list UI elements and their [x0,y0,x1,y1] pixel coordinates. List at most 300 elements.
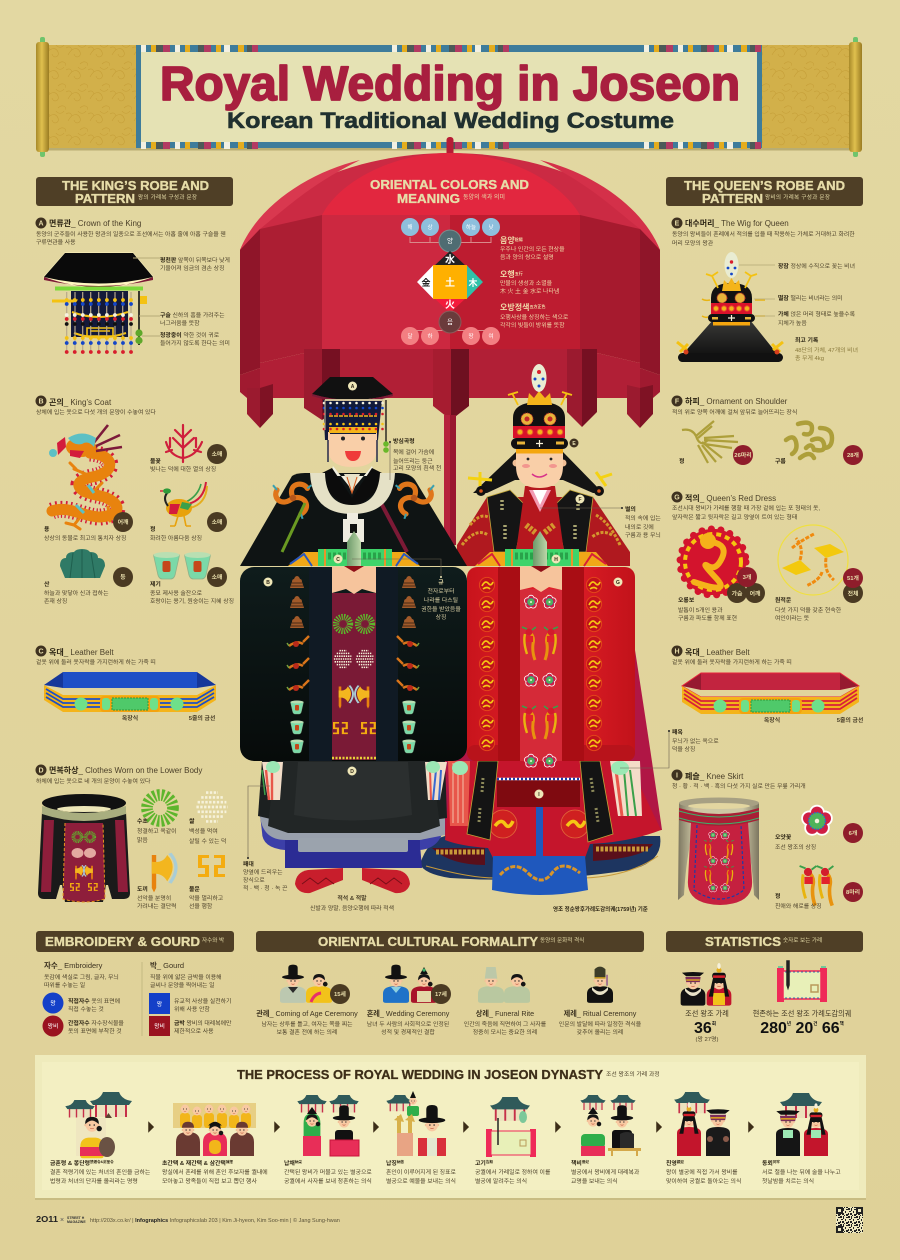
illustration: knee skirt [678,798,759,905]
captions G [678,596,842,622]
embroidery notes: 간접자수 자수장식물을 [68,1019,124,1027]
gourd text: 박_ Gourd [150,960,184,970]
callout lines [248,443,669,858]
heading: oriental colors: ORIENTAL COLORS AND [370,177,529,192]
embroidery notes [68,997,124,1035]
parasol hanging strips [247,349,653,428]
footer credits: × [60,1217,64,1224]
captions B: 제기 [150,580,161,588]
callout text A: 들어가지 않도록 한다는 의미 [160,339,230,347]
element diamond: 火 [445,299,455,311]
illustration: red belt [682,673,859,714]
element diamond: 水 [445,253,455,266]
callout text A: 기울어져 임금의 겸손 상징 [160,264,225,272]
heading bar formality: ORIENTAL CULTURAL FORMALITY [318,934,538,949]
icon: flame coral [166,425,202,462]
heading: oriental colors: MEANING [397,191,460,206]
badge labels F: 꿩 [679,457,684,465]
panel: G red dress [672,492,863,622]
callout: 패대: 장식으로 [243,876,265,884]
panel: queen's robe header: THE QUEEN’S ROBE AND [684,179,845,193]
king collar [310,468,395,542]
footer credits: STREET H [67,1216,85,1220]
stat: wedding count: 36 [694,1020,712,1037]
badge labels G: 3개 [743,573,751,581]
queen coat center motifs [522,595,558,767]
section title H: H [674,648,680,656]
stat: document count: 20 [791,1020,813,1037]
king face [323,400,382,490]
king jade tablet [347,531,361,566]
caption step 8 [762,1159,841,1185]
badge labels G: 어깨 [750,590,761,598]
callout text A: 평천판 앞쪽이 뒤쪽보다 낮게 [160,256,230,264]
icon: axe [152,853,178,892]
captions I: 친애와 해로를 상징 [775,902,822,910]
callout text E: 가체 얹은 머리 형태로 높을수록 [778,310,856,318]
caption step 2 [162,1159,268,1185]
five elements diagram [401,218,500,345]
caption step 5: 고기 [475,1161,486,1167]
caption coming of age [256,1009,358,1036]
heading bar embroidery: EMBROIDERY & GOURD [45,934,200,949]
callout: 방심곡령: 고리 모양의 흰색 천 [393,464,441,472]
caption step 7: 친영 [666,1161,677,1167]
badges I [843,823,863,902]
panel: I knee skirt [672,770,863,910]
gold brocade panels [49,45,849,150]
arrow 2 [275,1123,279,1131]
icon: ritual officiant [587,967,613,1003]
process heading: 조선 왕조의 가례 과정 [606,1070,660,1078]
callout lines E [739,265,775,316]
yang circles: 낮 [489,223,494,231]
callout: 규: 나라를 다스릴 [424,596,458,604]
caption step 6: 冊妃 [582,1159,589,1164]
captions B: 산 [44,580,50,588]
caption step 8: 첫날밤을 치르는 의식 [762,1177,814,1185]
step 4 [386,1091,457,1185]
callout text E: 떨잠 떨리는 비녀라는 의미 [778,294,843,302]
heading bar embroidery: 자수와 박 [202,936,224,944]
badge 15세: 15세 [334,990,346,998]
embroidery notes: 옷의 표면에 부착한 것 [68,1027,122,1035]
gourd notes: 금박 왕비의 대례복에만 [174,1019,232,1027]
belt labels H: 5줄의 금선 [837,716,863,724]
icon: ritual cups [154,552,210,579]
section title G [672,492,820,521]
callout text A: 구슬 신하의 흠을 가려주는 [160,311,225,319]
figure tags: E [572,441,576,447]
gourd notes [174,997,232,1035]
illustration: skirt [38,794,130,902]
illustration step 8 [776,1093,828,1156]
caption step 6: 책비 [571,1161,582,1167]
queen skirt hem [420,836,660,880]
colors explanation text: 만물의 생성과 소멸을 [500,279,553,287]
stat: document count [753,1009,851,1037]
figure tags: I [538,792,540,798]
callout lines A [133,258,160,336]
heading: oriental colors: 동양의 색과 의미 [463,193,505,201]
caption step 7 [666,1159,741,1185]
section title C: 겉옷 위에 둘러 옷자락을 가지런하게 하는 가죽 띠 [36,658,156,666]
panel: embroidery and gourd [36,931,234,1036]
ceremony: funeral [464,967,547,1036]
colors explanation text [500,235,569,329]
heading bar formality [256,931,644,952]
callout: 규: 규 [438,579,444,586]
colors explanation text: 陰陽 [515,236,523,242]
queen trailing robe [444,600,662,840]
caption step 2: 揀擇 [226,1159,233,1164]
yang circles: 하늘 [466,223,476,231]
stat: document count: 건 [813,1020,817,1026]
section title E: 동양의 왕비들이 혼례에서 적의를 입을 때 착용하는 가체로 거대하고 화려한 [672,230,855,238]
illustration step 4 [386,1091,446,1156]
queen crown head [468,364,612,486]
illustration step 6 [580,1095,641,1156]
yin circles: 음 [447,318,453,326]
blue frame with stripes [136,45,762,149]
colors explanation text: 음과 양의 쌍으로 설명 [500,253,554,261]
figure tags: B [266,580,270,586]
section title B: 곤의_ King’s Coat [49,397,112,407]
yin circles: 달 [408,332,413,340]
captions D: 불문 [189,885,200,893]
section title E: 머리 모양의 왕관 [672,239,714,247]
illustration step 1 [65,1092,132,1158]
callout: 규: 권한을 받았음을 [421,605,461,613]
belt labels: 5줄의 금선 [189,714,215,722]
section title D [36,764,202,785]
section title F: 적의 위로 양쪽 어깨에 걸쳐 앞뒤로 늘어뜨리는 장식 [672,408,797,416]
icon: dragon medallion [680,529,746,595]
embroidery text: 자수_ Embroidery [44,961,103,970]
callout: 규 [421,576,461,621]
belt labels: 옥장식 [122,714,138,722]
yin circles [401,311,500,345]
panel: queen's robe header: PATTERN [702,192,763,206]
badge labels B: 소매 [212,573,222,581]
king black coat [240,566,467,761]
caption step 7: 親迎 [677,1159,684,1164]
caption step 6: 별궁에서 왕비에게 대례복과 [571,1168,640,1176]
illustration step 2 [173,1103,256,1156]
heading bar statistics: 숫자로 보는 가례 [783,936,822,944]
icon: olive phoenix [682,421,738,463]
illustration step 5 [486,1097,536,1157]
king crown [312,377,393,453]
caption funeral: 정중히 모시는 중요한 의례 [473,1028,537,1036]
captions D: 쌀 [189,817,195,825]
process heading: THE PROCESS OF ROYAL WEDDING IN JOSEON DYNASTY [237,1067,603,1082]
callout: 패대: 패대 [243,860,254,868]
queen skirt [445,761,661,858]
callout: 별의: 구름과 용 무늬 [625,531,661,539]
panel: oriental cultural formality [256,931,644,1036]
caption step 8: 同牢 [773,1159,780,1164]
king shoulder dragons [273,484,434,519]
scroll roller right [849,37,862,157]
arrow 6 [657,1123,661,1131]
description A: 동양의 군주들이 사용한 왕관의 일종으로 조선에서는 아홉 줄에 아홉 구슬을 꿴 [36,230,226,238]
section title A: 면류관_ Crown of the King [49,218,141,228]
panel: queen's robe header: 왕비의 가례복 구성과 문장 [765,193,830,201]
king blue layer [260,810,445,868]
footer credits: MAGAZINE [67,1220,86,1224]
callout: 패옥: 패옥 [672,728,683,736]
icon: water weed [147,795,173,821]
panel: process of royal wedding [35,1055,866,1200]
captions G: 오룡보 [678,597,695,604]
footer credits [36,1215,340,1224]
figure tags: A [351,384,355,390]
caption step 8: 동뢰 [762,1161,773,1167]
embroidery queen marker: 왕비 [48,1022,58,1030]
callout text E: 총 무게 4kg [795,354,824,362]
section title F: 하피_ Ornament on Shoulder [685,396,788,406]
callout text A: 청광충이 약한 것이 귀로 [160,331,220,339]
ceremony: coming of age [256,965,358,1036]
stat: document count: 280 [760,1020,787,1037]
caption wedding [367,1009,450,1036]
belt labels H [764,716,863,724]
captions I: 꿩 [775,892,780,900]
heading bar formality: 동양의 문화적 격식 [540,936,584,944]
queen upper robe [457,486,630,566]
yang circles: 양 [447,237,453,245]
caption step 5: 궁궐에서 가례일로 정하여 이를 [475,1168,551,1176]
panel: C leather belt [36,646,216,722]
caption step 1: 결혼 적령기에 있는 처녀의 혼인을 금하는 [50,1168,151,1176]
step 2 [162,1103,268,1185]
caption step 1: 禁婚令&封單令 [90,1159,114,1164]
figure tags: F [578,497,582,503]
badge labels B: 등 [120,574,126,581]
icon: fu symbol [198,855,225,877]
belt labels [122,714,215,722]
yin circles: 여 [489,332,494,340]
panel: king's robe header: THE KING’S ROBE AND [62,179,209,193]
caption step 7: 왕이 별궁에 직접 가서 왕비를 [666,1168,738,1176]
queen blue front panel [492,779,588,895]
caption step 5: 별궁에 알려주는 의식 [475,1177,527,1185]
callout: 패옥: 덕을 상징 [672,745,695,753]
caption step 2: 왕실에서 혼례를 위해 혼인 후보자를 궐내에 [162,1168,268,1176]
callout: 규: 천자로부터 [427,587,455,595]
badge 17세: 17세 [435,990,447,998]
caption step 4: 납징 [386,1161,397,1167]
captions B: 화려한 아름다움 상징 [150,534,202,542]
icon: mountain [60,549,105,578]
panel: D lower clothes [36,764,228,910]
caption step 5: 告期 [486,1159,493,1164]
section title E: E [675,220,680,228]
colors explanation text: 각각의 빛들이 방위를 뜻함 [500,321,565,329]
caption step 2: 초간택 & 재간택 & 삼간택 [162,1161,226,1167]
badges B [113,444,227,587]
captions D: 가려내는 결단력 [137,902,177,910]
caption step 5 [475,1159,551,1185]
process background [35,1055,866,1200]
section title C: C [38,648,44,656]
caption step 4: 혼인이 이루어지게 된 징표로 [386,1168,457,1176]
caption step 6: 교명을 보내는 의식 [571,1177,618,1185]
captions D: 악을 멀리하고 [189,894,224,902]
figure tags: C [336,557,340,563]
icon: royal couple [681,963,731,1006]
section title I: 폐슬_ Knee Skirt [685,771,744,781]
section title F [672,396,797,416]
step 3 [284,1095,372,1185]
yang circles: 해 [408,223,413,231]
embroidery king marker: 왕 [50,999,56,1007]
stat: document count: 년 [787,1020,791,1026]
callout: 방심곡령: 방심곡령 [393,437,415,445]
caption step 3: 納采 [295,1159,302,1164]
stat: wedding count: 조선 왕조 가례 [685,1009,729,1018]
captions D: 맑음 [137,836,148,844]
step 1 [50,1092,151,1185]
scroll roller left [36,37,49,157]
illustration: wig [677,252,783,362]
section title G: 적의_ Queen’s Red Dress [685,493,776,503]
colors explanation text: 五方正色 [529,303,545,309]
heading bar statistics [666,931,863,952]
king black skirt [258,761,447,833]
badge labels B [118,450,222,581]
figure: king [240,377,467,893]
gourd queen marker [149,1016,170,1036]
caption step 4: 별궁으로 예물을 보내는 의식 [386,1177,456,1185]
caption ritual: 인문의 발달에 따라 일정한 격식을 [559,1020,642,1028]
captions B: 존재 상징 [44,597,67,605]
badges G [727,567,863,603]
colors explanation text: 오방정색 [500,303,529,312]
gourd text: 글씨나 문양을 찍어내는 일 [150,981,215,989]
section title D: D [38,768,44,774]
section title I [672,770,806,790]
arrow 1 [149,1123,153,1131]
callout: 적석 적말: 적석 & 적말 [337,894,367,902]
icon: coming of age couple [280,965,332,1003]
section title G: 조선시대 왕비가 가례를 행할 때 가장 겉에 입는 포 형태의 옷, [672,504,820,512]
caption funeral [464,1009,547,1036]
captions B: 빛나는 덕에 대한 열의 상징 [150,465,216,473]
captions I [775,829,860,910]
panel: king's robe header: PATTERN [75,192,135,206]
caption step 7: 맞이하여 궁궐로 돌아오는 의식 [666,1177,741,1185]
badge labels B: 어깨 [118,518,129,526]
colors explanation text: 五行 [515,270,523,276]
badge labels G: 51개 [847,574,859,582]
source note: 영조 정순왕후가례도감의궤(1759년) 기준 [553,905,648,913]
yang circles: 상 [428,223,433,231]
panel: E wig [672,218,858,362]
callout: 패옥: 무늬가 없는 옥으로 [672,737,719,745]
main title: Royal Wedding in Joseon [160,58,740,111]
section title I: I [676,772,678,780]
icon: wedding couple [383,965,437,1003]
panel: H leather belt [672,646,863,724]
captions B: 종묘 제사용 술잔으로 [150,589,203,597]
QR code [836,1207,863,1233]
callout text A: 너그러움을 뜻함 [160,319,200,327]
caption step 4 [386,1159,457,1185]
captions I: 6개 [849,829,857,837]
section title B: B [38,398,44,406]
gourd notes: 유교적 사상을 실천하기 [174,997,231,1005]
queen jade tablet [533,531,547,566]
callout text E: 지체가 높음 [778,319,807,327]
step 7 [666,1092,741,1185]
colors explanation text: 음양 [500,236,515,245]
element diamond: 木 [468,277,478,288]
king tassels [262,761,447,800]
section title D: 하체에 입는 옷으로 네 개의 문양이 수놓여 있다 [36,777,151,785]
step 5 [475,1097,551,1185]
parasol pole [444,415,456,545]
heading bar embroidery [36,931,234,952]
section title B: 상체에 입는 옷으로 다섯 개의 문양이 수놓여 있다 [36,408,156,416]
gourd notes: 제한적으로 사용 [174,1027,214,1035]
callout text A [160,256,230,347]
panel: A crown of the king [36,218,230,352]
stat: wedding count: 회 [712,1020,716,1027]
callout: 적석 적말 [310,894,394,912]
callout text E: 장잠 정상에 수직으로 꽂는 비녀 [778,262,855,270]
colors explanation text: 木 火 土 金 水로 나타냄 [500,287,559,295]
caption step 1: 법령과 처녀의 단자를 올리라는 명령 [50,1177,138,1185]
embroidery text: 따위를 수놓는 일 [44,981,85,989]
callout: 규: 상징 [436,613,446,621]
callout: 별의 [621,505,661,539]
yang circles [401,218,500,252]
parasol knob [446,137,454,157]
panel: statistics [666,931,863,1043]
badges F [733,445,863,465]
section title A: A [38,220,44,228]
callout: 패대: 적 · 백 · 청 · 녹 끈 [243,884,288,892]
captions G: 발톱이 5개인 용과 [678,606,723,614]
callout text E [778,262,858,362]
heading bar statistics: STATISTICS [705,934,781,949]
captions D: 살릴 수 있는 덕 [189,837,226,845]
colors explanation text: 오행 [500,270,515,279]
embroidery text [44,961,119,989]
element diamond: 土 [445,276,455,289]
element diamond: 金 [421,277,431,288]
icon: dragon [49,425,122,529]
panel: king's robe header [36,177,233,206]
callout: 방심곡령 [389,437,441,472]
caption step 3: 납채 [284,1161,295,1167]
callout: 적석 적말: 신발과 양말, 음양오행에 따라 적색 [310,904,394,912]
callouts on figures [243,437,719,913]
icon: royal document [777,961,827,1002]
captions D: 청결하고 옥같이 [137,827,177,835]
captions B: 하늘과 맞닿아 신과 접하는 [44,589,109,597]
caption step 3 [284,1159,372,1185]
embroidery notes: 직접 수놓는 것 [68,1005,104,1013]
queen hair wig [473,452,604,496]
captions G: 구름과 파도를 함께 표현 [678,614,737,622]
badge labels G [732,573,859,598]
captions B: 용 [44,526,50,533]
king coat motif columns [287,576,419,753]
caption ritual [559,1009,642,1036]
